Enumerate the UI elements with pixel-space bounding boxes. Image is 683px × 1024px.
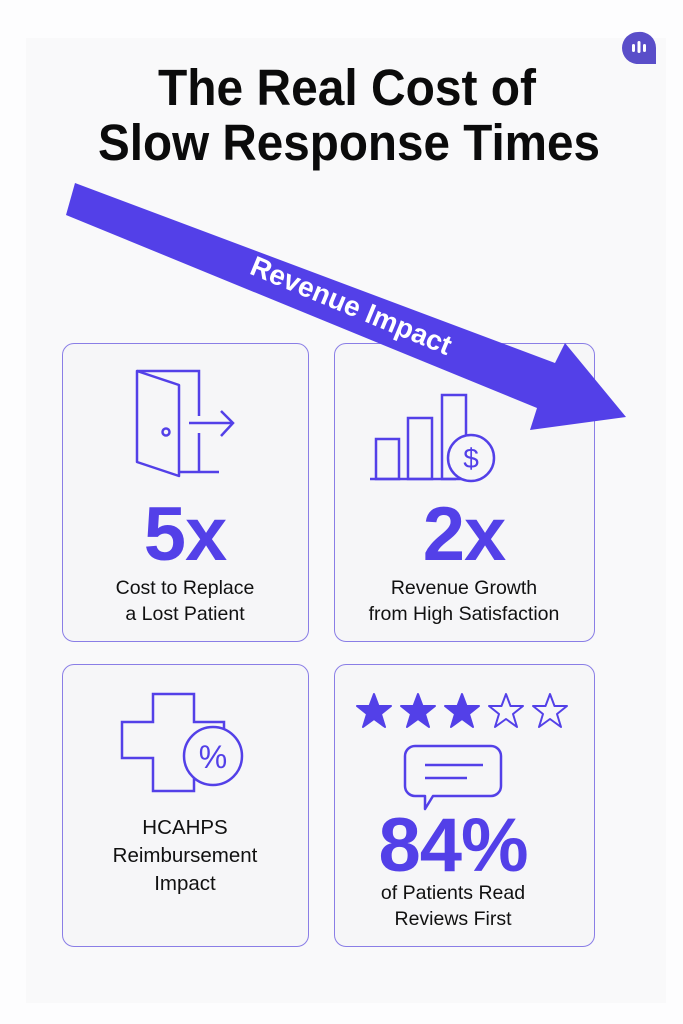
icon: cross with percent <box>120 692 244 792</box>
label: a Lost Patient <box>125 603 245 625</box>
label: Impact <box>154 872 216 895</box>
card: lost patient <box>62 343 309 642</box>
icon: speech bubble <box>404 744 502 810</box>
label <box>116 577 254 625</box>
icon: bar chart with dollar <box>370 394 496 482</box>
label: Reviews First <box>394 908 512 930</box>
title: Slow Response Times <box>98 114 600 171</box>
stat: 5x: 5x <box>144 492 226 577</box>
stat: 2x: 2x <box>423 492 505 577</box>
stat: 84%: 84% <box>378 803 528 888</box>
label: Revenue Growth <box>391 577 537 599</box>
label: Reimbursement <box>113 844 257 867</box>
label: from High Satisfaction <box>369 603 559 625</box>
logo icon <box>622 32 656 64</box>
title: The Real Cost of <box>158 59 537 116</box>
arrow: revenue impact: Revenue Impact <box>246 250 456 361</box>
label <box>368 577 559 625</box>
card: HCAHPS <box>62 664 309 947</box>
icon: stars <box>356 693 568 728</box>
title <box>98 59 600 171</box>
icon: door <box>136 370 235 478</box>
card: reviews <box>334 664 595 947</box>
label: HCAHPS <box>142 816 228 839</box>
label <box>113 816 258 895</box>
icon: cross with percent: % <box>199 739 227 775</box>
label: Cost to Replace <box>116 577 254 599</box>
card: revenue growth <box>334 343 595 642</box>
icon: bar chart with dollar: $ <box>463 443 479 474</box>
label <box>381 882 525 930</box>
label: of Patients Read <box>381 882 525 904</box>
